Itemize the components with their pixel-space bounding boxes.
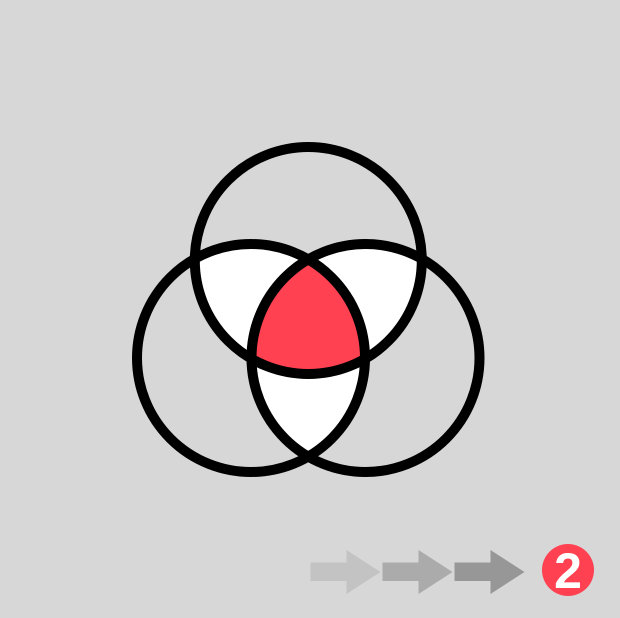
venn diagram: [137, 147, 480, 472]
arrow: light: [310, 550, 380, 594]
intersection: top and left: [200, 249, 298, 350]
infographic canvas: [132, 142, 594, 596]
circle outline: top: [195, 147, 422, 374]
badge circle: [542, 544, 594, 596]
circle outline: right: [252, 244, 480, 472]
intersection: all three circles: [256, 265, 360, 369]
step number badge: [542, 543, 594, 599]
badge number: 2: [554, 543, 582, 599]
arrow: medium: [382, 550, 452, 594]
circle outline: left: [137, 244, 365, 472]
intersection: top and right: [318, 249, 417, 350]
intersection: left and right: [257, 368, 360, 451]
arrow: dark: [454, 550, 524, 594]
